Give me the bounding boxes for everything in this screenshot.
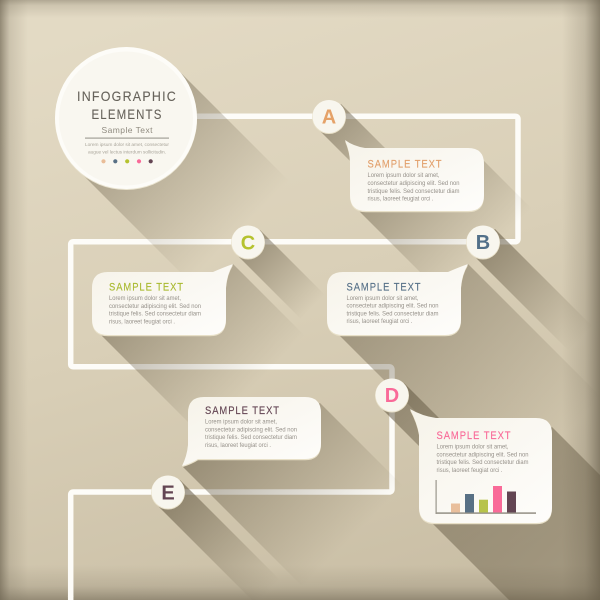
- speech bubble B: [327, 264, 468, 336]
- long shadows: [76, 68, 600, 600]
- heading: [77, 88, 177, 122]
- bubble A body: tristique felis. Sed consectetur diam: [368, 188, 460, 195]
- node A: [312, 100, 346, 134]
- bubble E body: consectetur adipiscing elit. Sed non: [205, 426, 297, 433]
- heading: INFOGRAPHIC: [77, 88, 177, 104]
- bubble B body: consectetur adipiscing elit. Sed non: [346, 302, 439, 310]
- node D: [375, 378, 409, 412]
- bubble C body: consectetur adipiscing elit. Sed non: [109, 303, 201, 310]
- node E: E: [161, 482, 175, 504]
- bubble D body: consectetur adipiscing elit. Sed non: [436, 451, 529, 458]
- bubble E title: SAMPLE TEXT: [205, 405, 280, 417]
- bubble B body: Lorem ipsum dolor sit amet,: [346, 295, 419, 302]
- bubble E body: risus, laoreet feugiat orci .: [205, 442, 271, 449]
- bubble D body: Lorem ipsum dolor sit amet,: [436, 444, 509, 450]
- bubble C title: SAMPLE TEXT: [109, 282, 184, 294]
- bubble D title: SAMPLE TEXT: [436, 430, 512, 442]
- intro text: Lorem ipsum dolor sit amet, consectetur: [85, 142, 169, 148]
- bubble A body: risus, laoreet feugiat orci .: [368, 196, 434, 202]
- bubble E body: tristique felis. Sed consectetur diam: [205, 434, 297, 441]
- intro text: augue vel lectus interdum sollicitudin.: [88, 150, 166, 156]
- bubble C body: Lorem ipsum dolor sit amet,: [109, 295, 181, 302]
- bubble B body: [346, 295, 439, 325]
- main title circle: [55, 47, 197, 190]
- heading: ELEMENTS: [92, 106, 162, 122]
- speech bubble E: [182, 397, 321, 467]
- bubble B body: risus, laoreet feugiat orci .: [346, 318, 413, 325]
- bubble E body: [205, 418, 297, 449]
- speech bubble C: [92, 264, 233, 336]
- speech bubble A: [345, 140, 484, 212]
- bar chart: [436, 480, 536, 514]
- node A: A: [322, 106, 336, 128]
- bubble A title: SAMPLE TEXT: [368, 158, 442, 170]
- node E: [151, 476, 185, 510]
- bubble A body: consectetur adipiscing elit. Sed non: [368, 180, 460, 187]
- bubble A body: [368, 172, 460, 202]
- bubble B title: SAMPLE TEXT: [346, 281, 422, 293]
- node C: [231, 226, 265, 260]
- bubble A body: Lorem ipsum dolor sit amet,: [368, 172, 440, 179]
- node D: D: [385, 385, 399, 407]
- colour dots: [101, 159, 153, 163]
- node C: C: [241, 232, 255, 254]
- bubble B body: tristique felis. Sed consectetur diam: [346, 310, 438, 317]
- divider rule: [85, 138, 169, 139]
- node B: B: [476, 232, 490, 254]
- bubble D body: [436, 444, 529, 474]
- intro text: [85, 142, 169, 156]
- connector path: [71, 116, 518, 597]
- connector tail to bottom edge: [68, 596, 73, 600]
- bubble C body: [109, 295, 201, 325]
- speech bubble D with bar chart: [410, 409, 552, 524]
- bubble D body: risus, laoreet feugiat orci .: [436, 467, 503, 474]
- subtitle: Sample Text: [102, 125, 153, 135]
- bubble D body: tristique felis. Sed consectetur diam: [436, 459, 528, 466]
- node B: [466, 226, 500, 260]
- bubble C body: tristique felis. Sed consectetur diam: [109, 310, 201, 318]
- bubble C body: risus, laoreet feugiat orci .: [109, 318, 175, 325]
- bubble E body: Lorem ipsum dolor sit amet,: [205, 418, 277, 426]
